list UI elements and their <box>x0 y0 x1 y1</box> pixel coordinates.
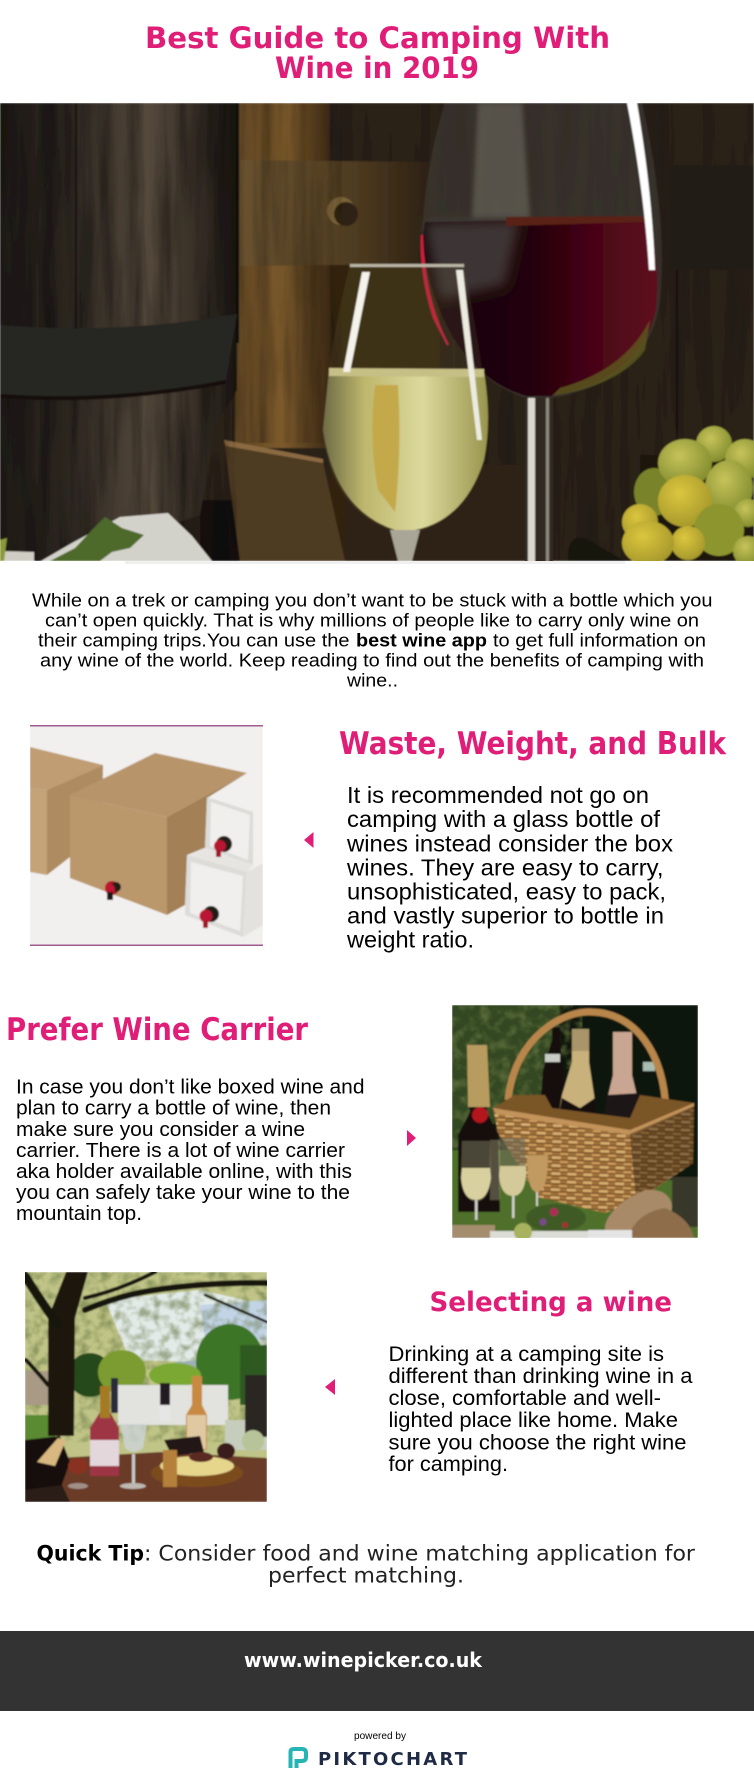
intro text: While on a trek or camping you don’t want to be stuck with a bottle which you <box>32 590 712 610</box>
intro text: wine.. <box>346 670 398 690</box>
intro text: their camping trips.You can use the <box>38 630 350 650</box>
powered by piktochart logo: PIKTOCHART <box>318 1749 468 1770</box>
intro text: best wine app <box>356 630 487 650</box>
body text: carrier: In case you don’t like boxed wine and <box>16 1076 364 1098</box>
dark barrel <box>0 103 239 561</box>
serving glasses <box>68 1424 264 1489</box>
photo: outdoor table <box>25 1272 267 1502</box>
title: Wine in 2019 <box>275 51 479 85</box>
body text: selecting: sure you choose the right wine <box>388 1430 686 1454</box>
body text: selecting <box>388 1342 693 1476</box>
quick tip: perfect matching. <box>268 1564 464 1588</box>
body text: waste: unsophisticated, easy to pack, <box>347 878 666 904</box>
heading: selecting a wine: Selecting a wine <box>430 1287 672 1318</box>
body text: selecting: close, comfortable and well- <box>388 1386 661 1410</box>
body text: carrier: plan to carry a bottle of wine, then <box>16 1096 331 1120</box>
body text: waste: weight ratio. <box>346 926 474 952</box>
cheese and parsley <box>0 513 212 561</box>
picnic food and flowers <box>452 1177 698 1241</box>
body text: waste: and vastly superior to bottle in <box>347 902 664 928</box>
wicker basket <box>493 1095 694 1213</box>
moet bottle <box>458 1045 500 1212</box>
intro text: can’t open quickly. That is why millions of people like to carry only wine on <box>45 610 699 630</box>
corkscrew <box>568 538 625 561</box>
title: Best Guide to Camping With <box>145 21 610 55</box>
body text: carrier <box>16 1076 364 1225</box>
body text: selecting: different than drinking wine in a <box>388 1364 693 1388</box>
body text: selecting: Drinking at a camping site is <box>388 1342 664 1366</box>
body text: waste: wines instead consider the box <box>346 830 674 856</box>
body text: selecting: lighted place like home. Make <box>388 1408 678 1432</box>
bread basket <box>37 1438 66 1466</box>
photo: wine basket <box>452 1005 698 1241</box>
heading: prefer wine carrier: Prefer Wine Carrier <box>6 1012 309 1048</box>
title <box>145 21 610 85</box>
hero photo: barrels and wine glasses <box>0 103 754 568</box>
back bottles <box>540 1026 658 1117</box>
arrow left 2 <box>325 1379 335 1395</box>
intro text: to get full information on <box>493 630 706 650</box>
body text: carrier: carrier. There is a lot of wine carrier <box>16 1139 345 1162</box>
footer bar: www.winepicker.co.uk <box>244 1648 483 1672</box>
champagne glasses <box>461 1138 548 1220</box>
cheese board <box>151 1450 243 1487</box>
powered by piktochart logo <box>290 1730 468 1770</box>
body text: carrier: aka holder available online, with this <box>16 1160 352 1183</box>
body text: carrier: you can safely take your wine to the <box>16 1181 350 1204</box>
arrow left 1 <box>304 832 314 848</box>
body text: waste: wines. They are easy to carry, <box>346 854 664 880</box>
intro text <box>32 590 712 690</box>
quick tip <box>36 1542 695 1588</box>
wooden post <box>224 103 525 561</box>
basket handle <box>508 1012 666 1112</box>
green grapes <box>622 426 754 566</box>
white wine glass <box>323 264 488 561</box>
body text: selecting: for camping. <box>388 1452 508 1476</box>
body text: waste <box>346 782 674 952</box>
footer bar <box>0 1631 754 1711</box>
quick tip: : Consider food and wine matching application for <box>144 1542 695 1566</box>
arrow right <box>407 1130 416 1146</box>
tree trunk and branches <box>25 1272 267 1436</box>
quick tip: Quick Tip <box>36 1542 144 1566</box>
red wine glass <box>422 103 662 568</box>
wine bottles <box>90 1376 207 1476</box>
powered by piktochart logo: powered by <box>354 1730 407 1742</box>
body text: waste: It is recommended not go on <box>347 782 649 808</box>
intro text: any wine of the world. Keep reading to find out the benefits of camping with <box>40 650 704 670</box>
photo: boxed wine <box>30 725 263 946</box>
body text: carrier: make sure you consider a wine <box>16 1118 305 1141</box>
body text: carrier: mountain top. <box>16 1202 142 1225</box>
wine tap spouts <box>105 836 232 928</box>
body text: waste: camping with a glass bottle of <box>347 806 661 832</box>
